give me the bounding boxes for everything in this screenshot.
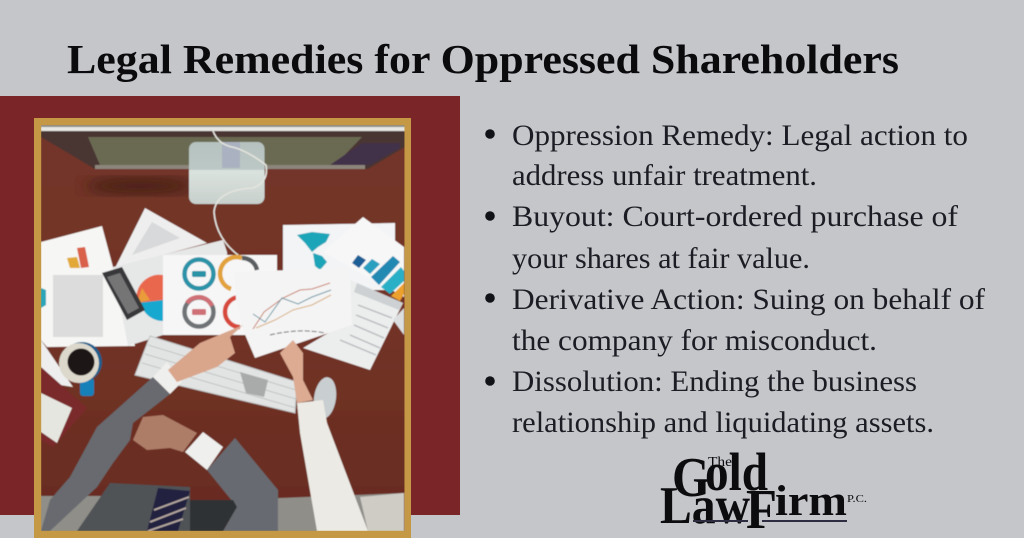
cable xyxy=(213,131,266,258)
monitor xyxy=(41,125,405,169)
logo: The Gold Law Firm P.C.: old xyxy=(705,442,768,502)
gold photo frame xyxy=(34,118,411,538)
desk surface xyxy=(41,125,405,531)
bullet 3 xyxy=(485,283,985,357)
man's sleeve and body xyxy=(77,483,190,531)
logo: The Gold Law Firm P.C.: Law xyxy=(660,477,750,535)
title: Legal Remedies for Oppressed Shareholders xyxy=(67,36,899,82)
bullet 4: relationship and liquidating assets. xyxy=(512,406,934,439)
logo: The Gold Law Firm P.C.: G xyxy=(672,447,710,509)
bullet 1 xyxy=(485,119,968,192)
bullet list xyxy=(485,119,985,439)
mouse xyxy=(313,376,338,418)
logo: The Gold Law Firm P.C. xyxy=(660,442,867,538)
shirt cuffs xyxy=(153,362,182,394)
papers xyxy=(41,208,404,370)
bullet 4 xyxy=(485,365,934,439)
paper under cup xyxy=(41,340,73,387)
logo: The Gold Law Firm P.C.: P.C. xyxy=(847,493,867,505)
bullet 2: Buyout: Court-ordered purchase of xyxy=(512,200,958,233)
logo: The Gold Law Firm P.C.: The xyxy=(708,455,732,470)
bullet 4: Dissolution: Ending the business xyxy=(512,365,917,398)
hands xyxy=(168,325,243,382)
photo: overhead view of business desk xyxy=(41,125,405,531)
pie chart xyxy=(136,275,163,321)
keyboard xyxy=(135,336,297,413)
bullet 1: Oppression Remedy: Legal action to xyxy=(512,119,968,152)
coffee cup xyxy=(59,342,102,396)
notebook and small keyboard xyxy=(41,367,87,447)
circle icons xyxy=(184,257,257,327)
bullet 1: address unfair treatment. xyxy=(512,159,817,192)
line chart paper xyxy=(234,268,352,358)
logo: The Gold Law Firm P.C.: irm xyxy=(775,478,847,525)
monitor stand xyxy=(189,142,264,204)
monitor shadow xyxy=(85,177,195,195)
phone xyxy=(102,267,145,320)
bullet 3: Derivative Action: Suing on behalf of xyxy=(512,283,985,316)
bullet 2 xyxy=(485,200,958,275)
panel: dark red backdrop xyxy=(0,96,460,515)
bullet 3: the company for misconduct. xyxy=(512,324,877,357)
bullet 2: your shares at fair value. xyxy=(512,242,810,275)
floor xyxy=(278,492,403,531)
woman's sleeve xyxy=(297,400,368,531)
